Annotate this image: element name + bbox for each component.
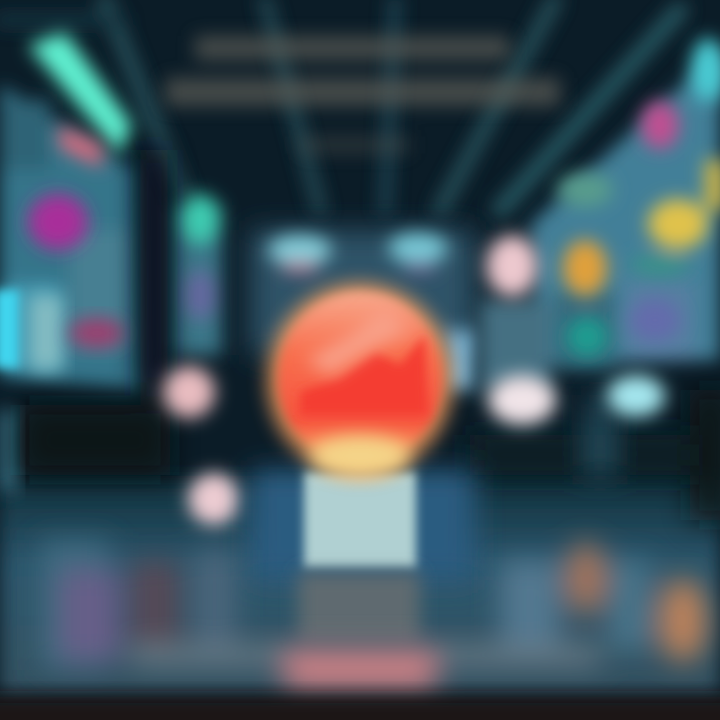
ceiling beams — [0, 0, 680, 210]
panel: centre left screen — [172, 194, 222, 355]
panel: left wall screen — [0, 85, 140, 390]
icon: rear lights — [268, 233, 475, 390]
panel: rear wall — [250, 230, 475, 355]
dark floor edge — [0, 697, 720, 720]
panel: right wall screen — [480, 50, 720, 390]
dark wall band — [20, 150, 720, 520]
floor — [0, 480, 720, 695]
pedestal — [250, 470, 475, 642]
heading: blurred title — [165, 36, 560, 154]
chart: right wall graphics — [557, 38, 720, 357]
chart: glowing red orb — [266, 282, 454, 478]
floor reflections — [40, 540, 707, 690]
chart: left wall graphics — [0, 32, 132, 490]
icon: left glowing bubbles — [163, 366, 240, 525]
icon: right glowing bubbles — [486, 235, 665, 425]
